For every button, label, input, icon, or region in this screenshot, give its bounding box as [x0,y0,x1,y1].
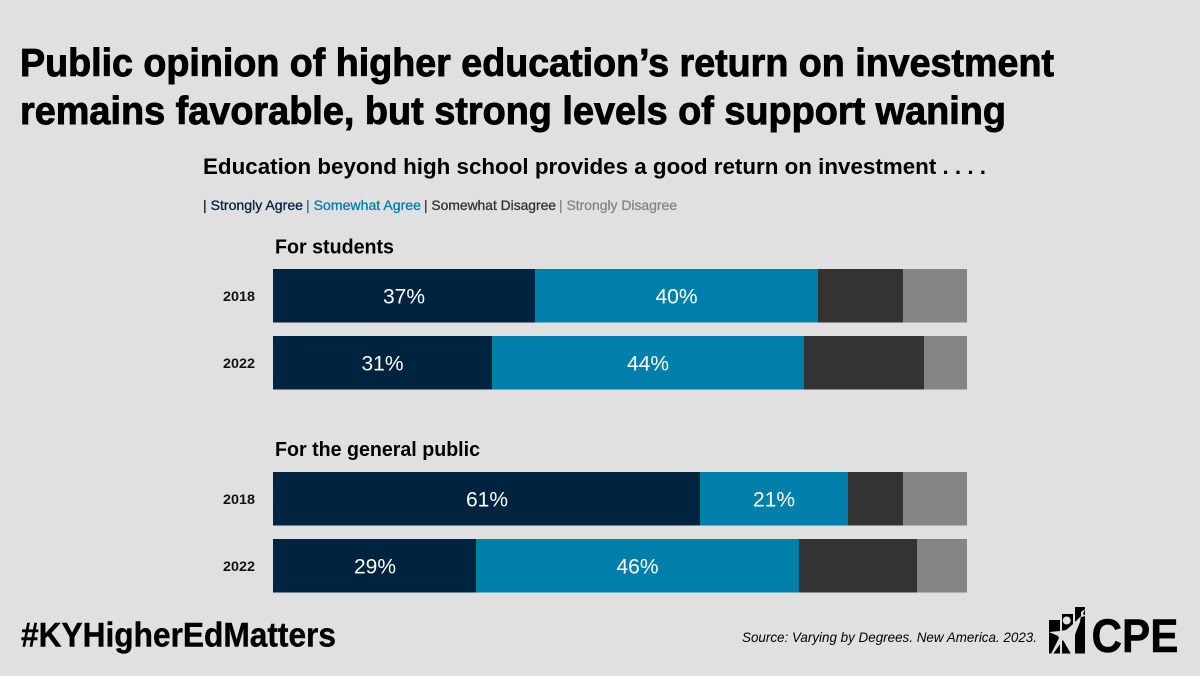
icon: rising bars with figure [1049,607,1086,654]
bar: general public 2022: 2022 [223,559,255,574]
bar: for students 2022: 2022 [223,356,255,371]
bar: general public 2022: 29% [354,556,396,578]
heading: for students: For students [275,236,394,258]
legend: | Strongly Disagree [559,197,677,213]
bar: for students 2018 [223,269,967,322]
bar: for students 2018: 2018 [223,289,256,304]
title [20,42,1054,133]
bar: general public 2018 [223,472,967,526]
bar: for students 2018: 40% [655,286,698,308]
hashtag: #KYHigherEdMatters [21,616,336,654]
title: Public opinion of higher education’s return on investment [20,42,1054,85]
logo: CPE: CPE [1092,609,1178,662]
bar: general public 2018: 61% [466,488,508,512]
bar: general public 2022 [223,539,967,592]
legend: | Strongly Agree [203,197,303,213]
bar: for students 2018: 37% [383,286,425,308]
heading: for the general public: For the general public [275,439,480,461]
source note: Source: Varying by Degrees. New America. 2023. [742,629,1037,645]
legend: | Somewhat Agree [306,197,421,213]
bar: for students 2022 [223,336,967,390]
bar: for students 2022: 31% [361,352,404,376]
title: remains favorable, but strong levels of support waning [20,90,1006,133]
bar: general public 2018: 2018 [223,492,256,507]
bar: general public 2018: 21% [753,488,795,512]
bar: general public 2022: 46% [616,556,659,578]
legend: | Somewhat Disagree [424,197,556,213]
subtitle: Education beyond high school provides a good return on investment . . . . [203,154,986,179]
legend [203,197,677,213]
bar: for students 2022: 44% [627,352,669,376]
logo: CPE [1049,607,1178,662]
